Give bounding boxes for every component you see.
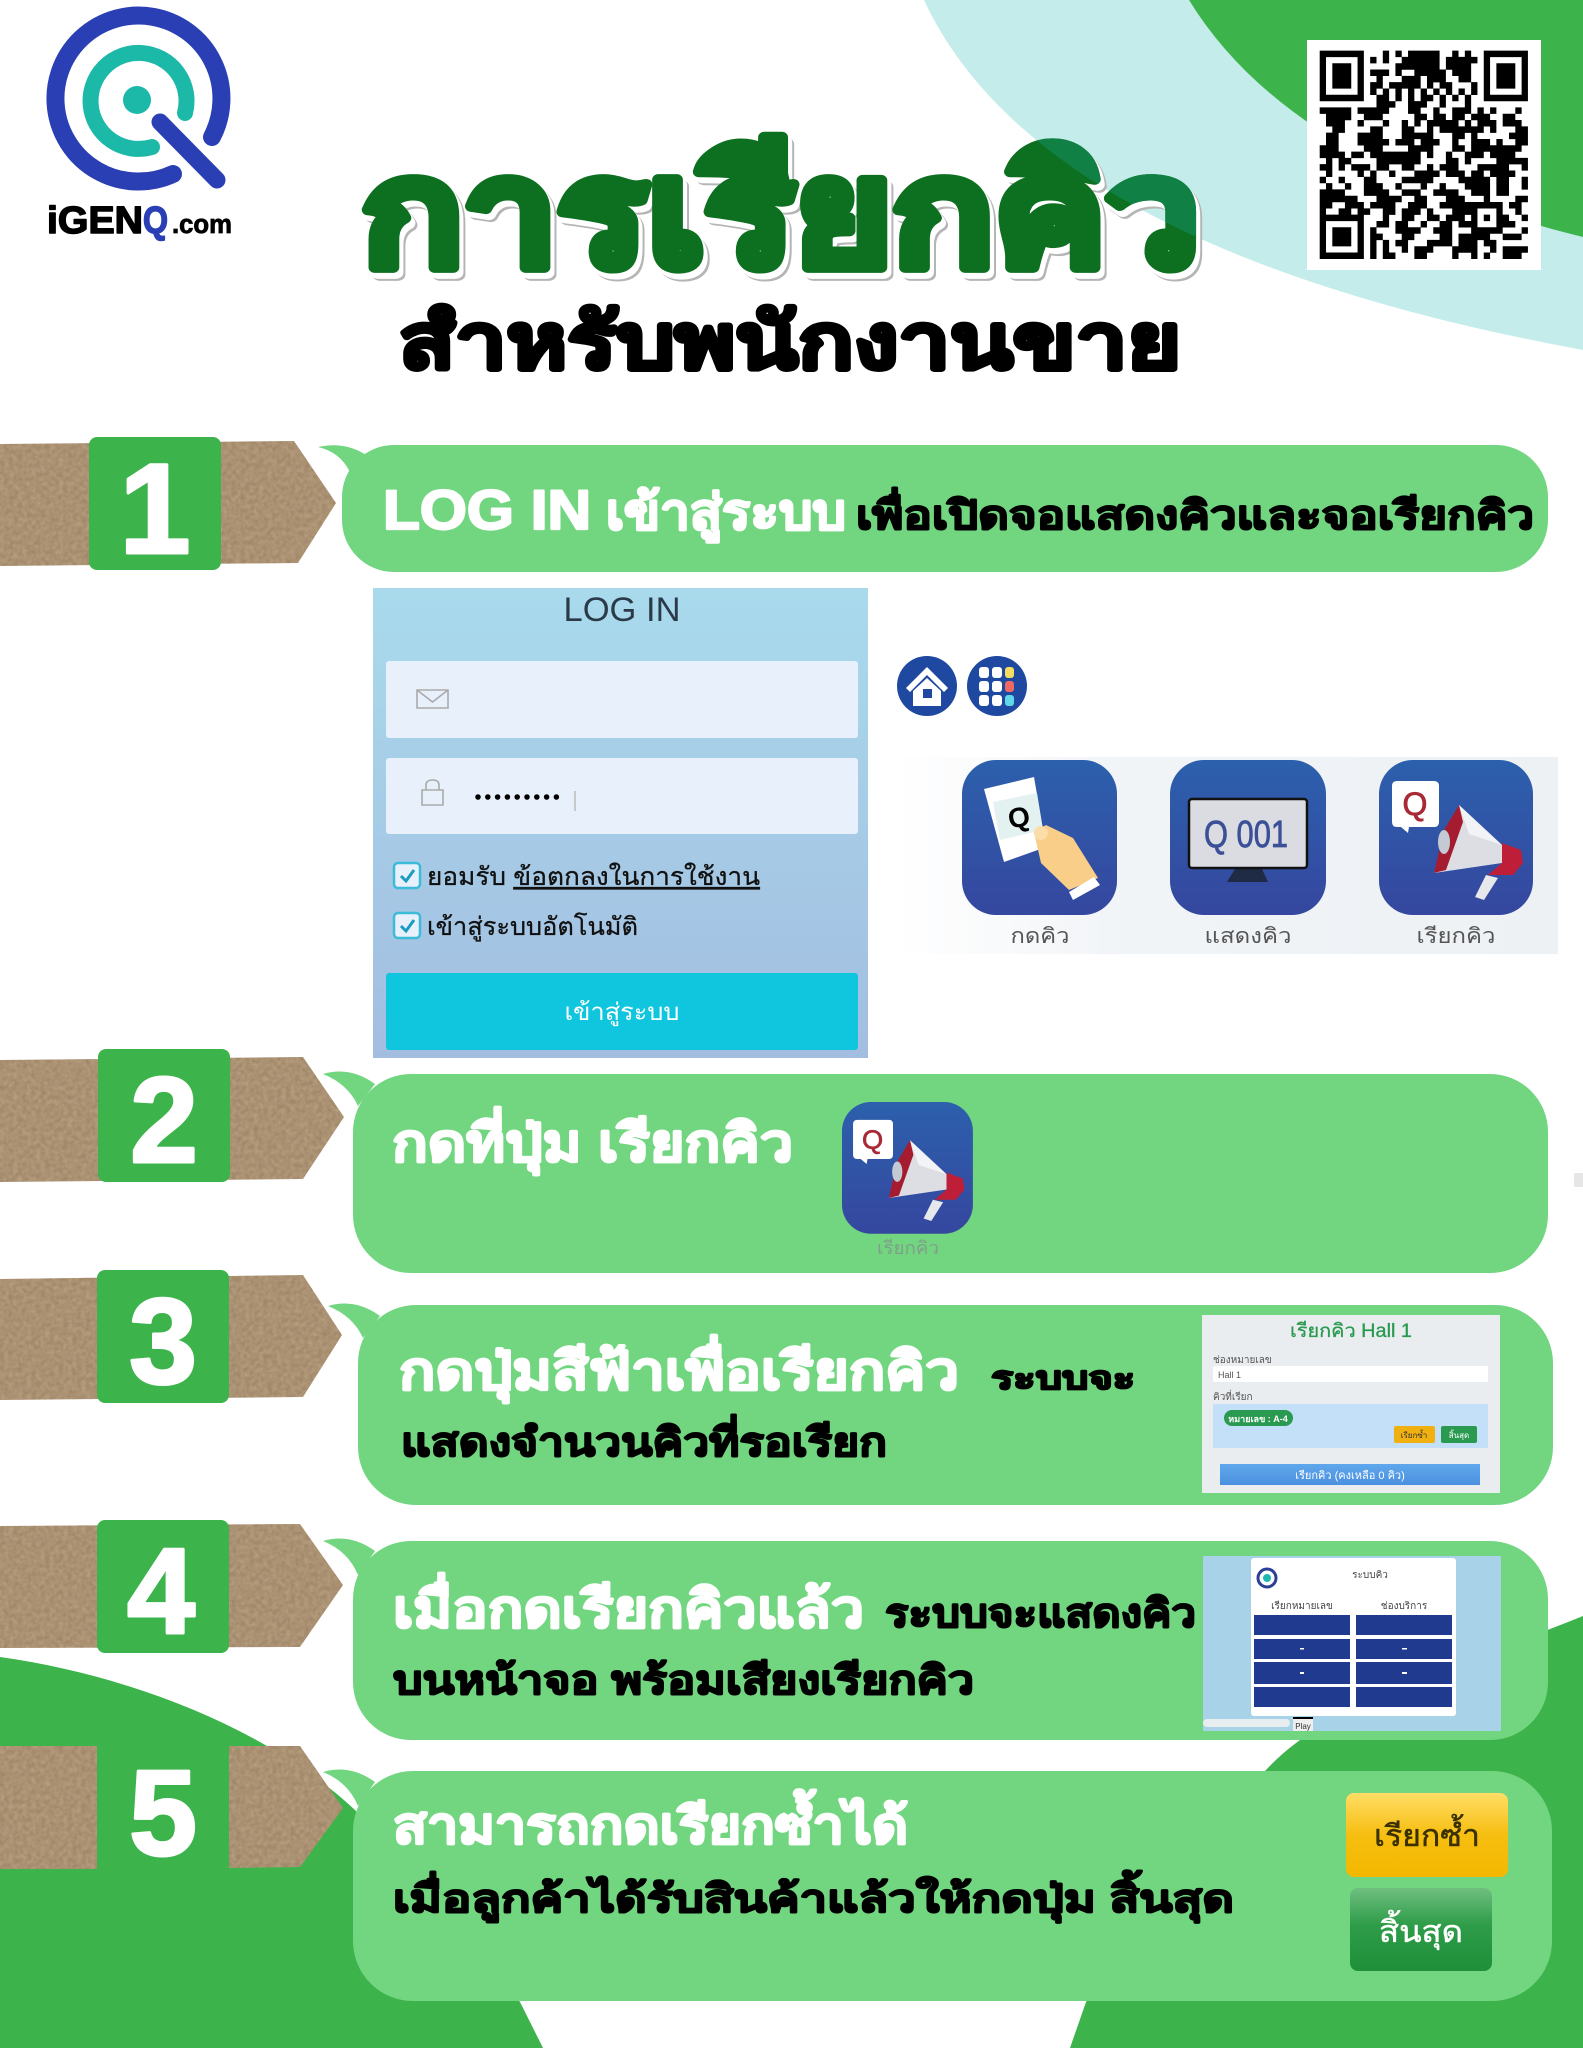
- button: finish: [1350, 1888, 1492, 1971]
- step 4 description line 1: ระบบจะแสดงคิว: [885, 1592, 1196, 1636]
- step 3 heading: กดปุ่มสีฟ้าเพื่อเรียกคิว: [399, 1335, 959, 1404]
- call queue screenshot: เรียกคิว (คงเหลือ 0 คิว): [1295, 1469, 1405, 1482]
- step 1 marker: [0, 437, 336, 581]
- step 1 heading: LOG IN เข้าสู่ระบบ: [383, 478, 846, 543]
- label: take queue: กดคิว: [1010, 925, 1070, 948]
- icon: display queue: Q 001: [1204, 814, 1288, 856]
- queue display screenshot: ช่องบริการ: [1381, 1601, 1428, 1612]
- queue display screenshot: เรียกหมายเลข: [1271, 1600, 1333, 1612]
- button: finish: สิ้นสุด: [1379, 1910, 1463, 1951]
- logo: iGENQ.com: Q: [143, 200, 168, 242]
- step 3 marker: 3: [129, 1273, 197, 1409]
- title: การเรียกคิว: [362, 132, 1200, 297]
- step 2 marker: [0, 1049, 344, 1188]
- icon: call queue: Q: [1403, 786, 1427, 822]
- background shape: green arc top right: [1189, 0, 1583, 237]
- login button: เข้าสู่ระบบ: [564, 999, 680, 1027]
- call queue screenshot: [1202, 1315, 1500, 1493]
- label: display queue: แสดงคิว: [1204, 925, 1292, 948]
- step 5 marker: [0, 1745, 343, 1881]
- app icons strip: [894, 757, 1558, 954]
- title: การเรียกคิว: [365, 137, 1203, 302]
- background shape: green bottom right: [1070, 1616, 1583, 2048]
- call queue screenshot: สิ้นสุด: [1449, 1429, 1469, 1440]
- login heading: LOG IN: [564, 591, 680, 629]
- step 3 description line 2: แสดงจำนวนคิวที่รอเรียก: [401, 1414, 887, 1465]
- icon: call queue button: Q: [862, 1124, 883, 1155]
- panel: step 2: [323, 1072, 1548, 1273]
- queue display screenshot: [1203, 1556, 1501, 1731]
- step 4 heading: เมื่อกดเรียกคิวแล้ว: [393, 1573, 864, 1639]
- button: repeat call: เรียกซ้ำ: [1374, 1814, 1480, 1853]
- logo: iGENQ.com: [47, 16, 232, 242]
- auto login checkbox: เข้าสู่ระบบอัตโนมัติ: [427, 912, 638, 942]
- login form screenshot: [373, 588, 868, 1058]
- QR code: [1307, 40, 1541, 270]
- call queue screenshot: Hall 1: [1218, 1370, 1241, 1380]
- icon: apps grid: [967, 656, 1027, 716]
- panel: step 4: [323, 1539, 1548, 1740]
- artifact at right edge: [1574, 1173, 1583, 1187]
- step 3 description line 1: ระบบจะ: [991, 1360, 1135, 1396]
- icon: call queue: [1379, 760, 1533, 915]
- panel: step 5: [323, 1770, 1552, 2001]
- step 4 marker: [0, 1520, 343, 1659]
- label: call queue: เรียกคิว: [1416, 925, 1496, 948]
- icon: take queue: [962, 760, 1117, 915]
- step 5 marker: 5: [129, 1745, 197, 1881]
- step 2 heading: กดที่ปุ่ม เรียกคิว: [392, 1107, 793, 1176]
- icon: display queue: [1170, 760, 1326, 915]
- queue display screenshot: ระบบคิว: [1352, 1570, 1388, 1581]
- icon label: เรียกคิว: [877, 1238, 939, 1258]
- button: repeat call: [1346, 1793, 1508, 1877]
- step 2 marker: 2: [130, 1052, 198, 1188]
- title: การเรียกคิว: [362, 132, 1200, 297]
- terms checkbox: ยอมรับ ข้อตกลงในการใช้งาน: [427, 862, 760, 891]
- step 4 marker: 4: [127, 1523, 195, 1659]
- logo: iGENQ.com: iGEN: [47, 200, 143, 242]
- call queue screenshot: เรียกซ้ำ: [1401, 1429, 1427, 1440]
- step 4 description line 2: บนหน้าจอ พร้อมเสียงเรียกคิว: [393, 1659, 974, 1703]
- call queue screenshot: หมายเลข : A-4: [1228, 1414, 1288, 1424]
- panel: step 1: [318, 445, 1548, 572]
- subtitle: สำหรับพนักงานขาย: [399, 300, 1181, 385]
- call queue screenshot: เรียกคิว Hall 1: [1290, 1320, 1412, 1342]
- step 5 description: เมื่อลูกค้าได้รับสินค้าแล้วให้กดปุ่ม สิ้นสุด: [393, 1870, 1234, 1923]
- email input: [386, 661, 858, 738]
- call queue screenshot: คิวที่เรียก: [1213, 1389, 1253, 1403]
- step 5 heading: สามารถกดเรียกซ้ำได้: [393, 1789, 908, 1854]
- step 1 description: เพื่อเปิดจอแสดงคิวและจอเรียกคิว: [856, 487, 1534, 538]
- login button: [386, 973, 858, 1050]
- title: การเรียกคิว: [367, 139, 1205, 304]
- step 1 marker: 1: [119, 438, 191, 581]
- password input: [386, 758, 858, 834]
- call queue screenshot: ช่องหมายเลข: [1213, 1355, 1272, 1366]
- background shape: pale teal arc top right: [924, 0, 1583, 350]
- queue display screenshot: Play: [1295, 1722, 1311, 1731]
- logo: iGENQ.com: .com: [172, 209, 232, 239]
- icon: call queue button: [842, 1102, 973, 1234]
- step 3 marker: [0, 1270, 342, 1409]
- panel: step 3: [328, 1304, 1553, 1505]
- background shape: green bottom left: [0, 1657, 543, 2048]
- icon: home: [897, 656, 957, 716]
- icon: take queue: Q: [1005, 800, 1032, 835]
